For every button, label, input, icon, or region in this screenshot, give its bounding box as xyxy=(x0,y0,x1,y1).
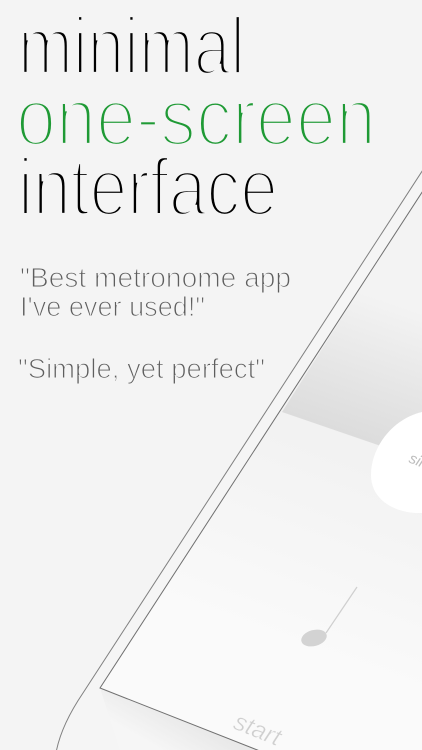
icon: music note xyxy=(299,587,357,649)
screen xyxy=(234,324,422,746)
quotes xyxy=(18,262,291,384)
phone body outline xyxy=(55,159,422,750)
screen edge xyxy=(100,180,422,750)
quote 1 xyxy=(20,262,291,322)
title line: interface: interface xyxy=(18,142,278,233)
title line: one-screen: one-screen xyxy=(16,72,376,163)
quote 1: I've ever used!" xyxy=(20,291,205,322)
quote 2: "Simple, yet perfect" xyxy=(18,353,265,384)
title line: minimal: minimal xyxy=(18,1,245,92)
screen upper wedge xyxy=(282,345,422,446)
white dial blob xyxy=(371,412,422,513)
quote 1: "Best metronome app xyxy=(20,262,291,293)
shadow under screen xyxy=(100,688,257,750)
title xyxy=(16,1,376,233)
phone illustration xyxy=(55,159,422,750)
screen lower panel xyxy=(90,190,422,750)
